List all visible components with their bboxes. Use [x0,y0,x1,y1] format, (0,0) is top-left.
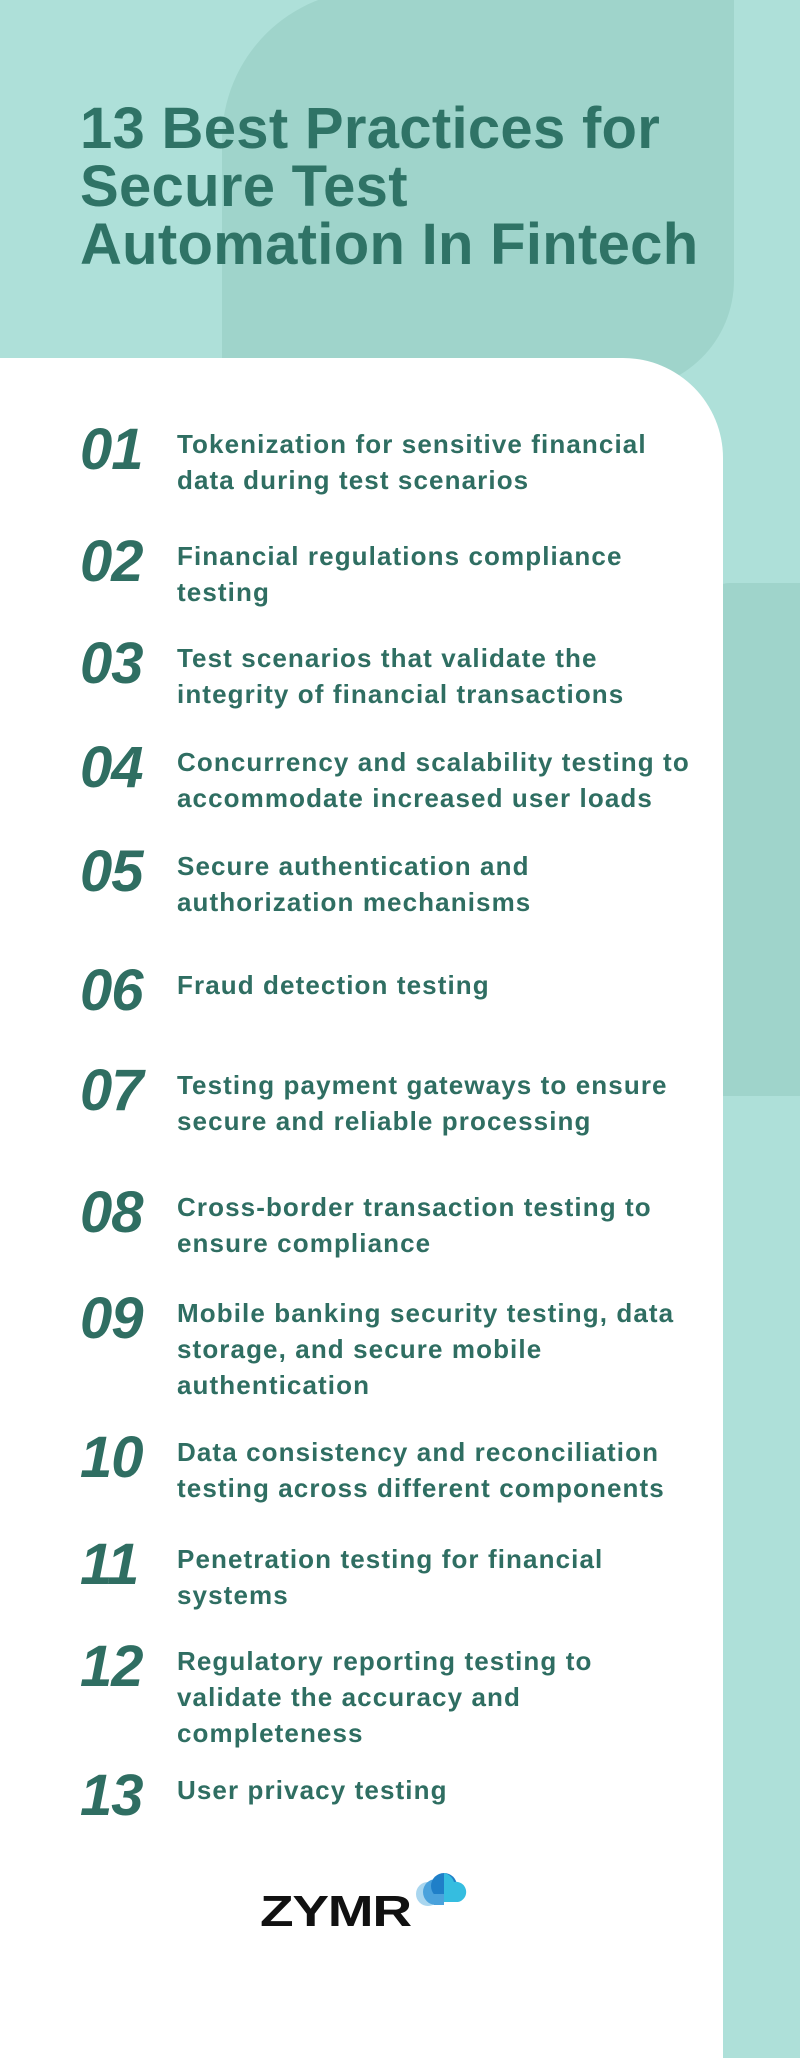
item 05 [80,839,531,917]
item 02: Financial regulations compliance [177,541,623,571]
item 01 [80,417,647,495]
item 03: integrity of financial transactions [177,679,624,709]
item 11: Penetration testing for financial [177,1544,603,1574]
item 12: 12 [80,1634,143,1699]
item 10: testing across different components [177,1473,665,1503]
item 02: 02 [80,529,143,594]
panel: white list panel [0,358,723,2058]
item 13: 13 [80,1763,143,1828]
background shape: dark teal [222,0,734,390]
icon: cloud [416,1873,466,1906]
title: 13 Best Practices for [80,96,660,161]
item 03 [80,631,624,709]
item 08: Cross-border transaction testing to [177,1192,652,1222]
item 04: Concurrency and scalability testing to [177,747,690,777]
item 11: systems [177,1580,289,1610]
item 02 [80,529,623,607]
item 10 [80,1425,665,1503]
item 12 [80,1634,592,1748]
item 05: authorization mechanisms [177,887,531,917]
title: Automation In Fintech [80,212,698,277]
item 07: 07 [80,1058,143,1123]
item 11 [80,1532,603,1610]
logo: ZYMR [260,1873,466,1936]
item 12: validate the accuracy and [177,1682,521,1712]
item 08: ensure compliance [177,1228,431,1258]
item 09: 09 [80,1286,143,1351]
item 13 [80,1763,448,1828]
item 02: testing [177,577,270,607]
logo text: ZYMR [260,1887,411,1936]
item 07 [80,1058,668,1136]
item 01: data during test scenarios [177,465,529,495]
panel: white list panel: authentication [177,1370,370,1400]
item 04: 04 [80,735,143,800]
item 06: Fraud detection testing [177,970,490,1000]
item 01: 01 [80,417,143,482]
item 03: Test scenarios that validate the [177,643,598,673]
item 10: 10 [80,1425,143,1490]
item 04: accommodate increased user loads [177,783,653,813]
item 06: 06 [80,958,143,1023]
item 09: storage, and secure mobile [177,1334,542,1364]
item 10: Data consistency and reconciliation [177,1437,659,1467]
title [80,96,698,277]
panel: white list panel: completeness [177,1718,364,1748]
item 07: secure and reliable processing [177,1106,592,1136]
item 05: Secure authentication and [177,851,530,881]
item 12: Regulatory reporting testing to [177,1646,592,1676]
item 09: Mobile banking security testing, data [177,1298,674,1328]
item 11: 11 [80,1532,138,1597]
item 08 [80,1180,652,1258]
title: Secure Test [80,154,408,219]
item 09 [80,1286,674,1400]
item 06 [80,958,490,1023]
item 04 [80,735,690,813]
item 01: Tokenization for sensitive financial [177,429,647,459]
item 05: 05 [80,839,143,904]
item 03: 03 [80,631,143,696]
background shape: right dark band [700,583,800,1096]
item 07: Testing payment gateways to ensure [177,1070,668,1100]
item 08: 08 [80,1180,143,1245]
item 13: User privacy testing [177,1775,448,1805]
